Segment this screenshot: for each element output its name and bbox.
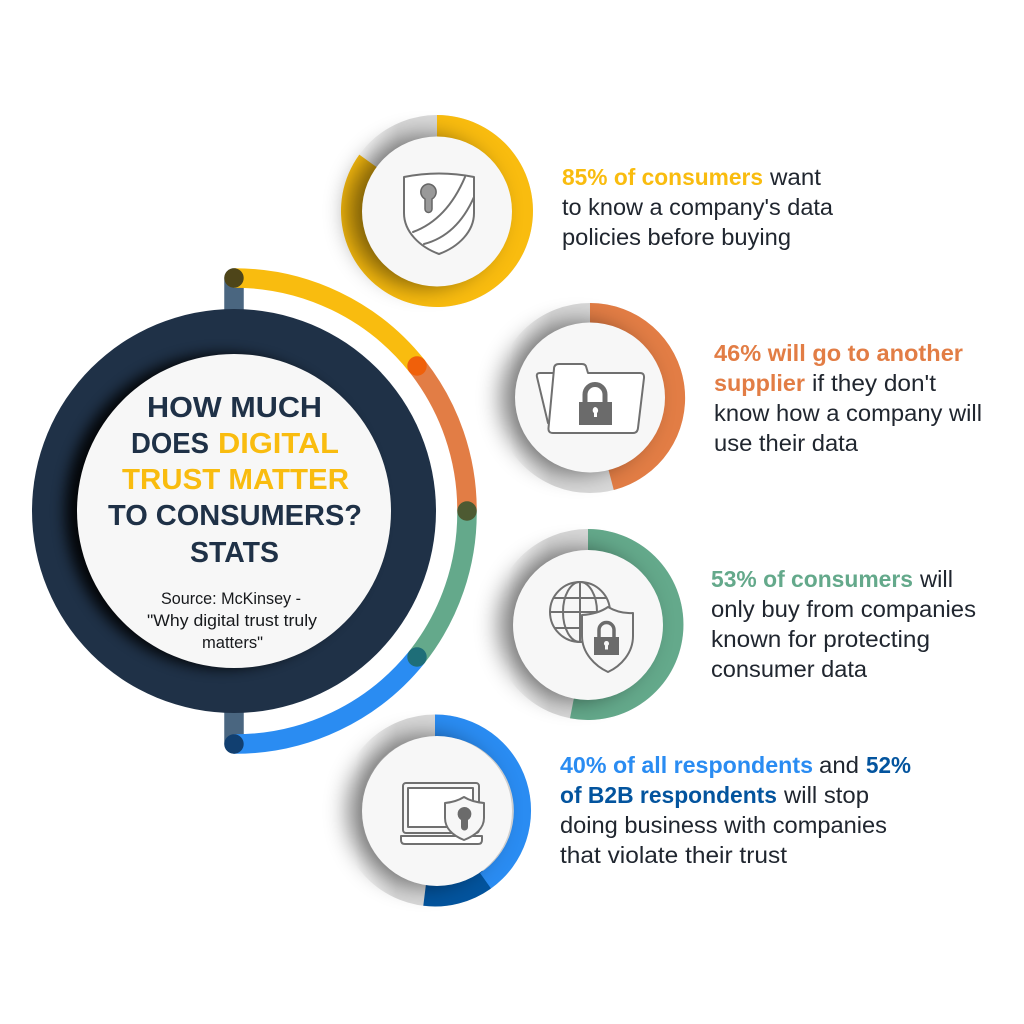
disc: [515, 322, 665, 472]
panel: 85% donut: [341, 115, 533, 307]
title line 2 dark: DOES: [131, 428, 209, 460]
shield outline: [404, 174, 474, 254]
highlighted B2B: of B2B respondents: [560, 782, 777, 808]
disc: [513, 550, 663, 700]
and: and: [819, 752, 859, 778]
shadow: [348, 736, 498, 886]
orange value arc: [590, 303, 685, 490]
highlighted line 1: 46% will go to another: [714, 340, 963, 366]
highlighted line 2: supplier: [714, 370, 805, 396]
connector stem bottom: [224, 700, 244, 744]
text: 46% stat: [714, 340, 982, 456]
connector: segmented arc around main circle: [234, 278, 467, 744]
source note: [147, 589, 318, 652]
line 4: consumer data: [711, 656, 867, 682]
joint bottom: [224, 734, 244, 754]
connector joints: [224, 268, 477, 754]
back sheet: [537, 373, 556, 423]
padlock shackle: [599, 623, 614, 638]
inner disc: [77, 354, 391, 668]
panel: 40% and 52% donut: [348, 714, 531, 907]
title line 4: TO CONSUMERS?: [108, 500, 362, 532]
shield: [445, 797, 484, 840]
arc segment: blue: [234, 657, 417, 744]
main circle: [32, 309, 436, 713]
text: 85% stat: [562, 164, 833, 250]
blue value arc: [435, 714, 531, 888]
highlighted phrase: 53% of consumers: [711, 566, 913, 592]
green value arc: [570, 529, 683, 720]
source line 2: "Why digital trust truly: [147, 611, 318, 630]
title line 1: HOW MUCH: [147, 392, 322, 424]
line 2 rest: if they don't: [812, 370, 937, 396]
padlock keyhole: [593, 407, 598, 417]
joint olive: [457, 501, 477, 521]
globe: [550, 582, 610, 642]
highlighted phrase: 85% of consumers: [562, 164, 763, 190]
highlighted 52%: 52%: [866, 752, 911, 778]
line 3: doing business with companies: [560, 812, 887, 838]
inner shadow: [58, 346, 324, 676]
title line 3: TRUST MATTER: [122, 464, 349, 496]
text: 53% stat: [711, 566, 976, 682]
yellow value arc: [341, 115, 533, 307]
navy ring: [32, 309, 436, 713]
icon: folder with padlock: [537, 364, 644, 433]
shield stripes: [413, 177, 474, 244]
keyhole: [421, 184, 436, 212]
arc segment: green: [417, 511, 467, 657]
shadow: [348, 136, 498, 286]
disc: [362, 736, 512, 886]
arc segment: yellow: [234, 278, 417, 366]
padlock keyhole: [604, 641, 609, 650]
joint orange: [407, 356, 427, 376]
line 2: to know a company's data: [562, 194, 833, 220]
title: [108, 392, 362, 569]
padlock body: [579, 402, 612, 425]
title line 2 highlight: DIGITAL: [218, 428, 339, 460]
panel: 46% donut: [501, 303, 685, 490]
disc: [362, 136, 512, 286]
phrase end: will: [919, 566, 953, 592]
line 4: use their data: [714, 430, 858, 456]
laptop base: [401, 836, 482, 844]
keyhole: [458, 807, 471, 830]
gray track: [503, 540, 673, 710]
shield: [582, 607, 633, 672]
joint teal: [407, 647, 427, 667]
shadow: [499, 550, 649, 700]
dark blue value arc: [423, 868, 491, 907]
source line 1: Source: McKinsey -: [161, 589, 301, 608]
line 3: policies before buying: [562, 224, 791, 250]
padlock shackle: [585, 384, 605, 403]
laptop screen inner: [408, 788, 473, 827]
icon: globe and shield lock: [550, 582, 633, 672]
padlock body: [594, 637, 619, 655]
shadow: [501, 323, 651, 473]
laptop screen outer: [403, 783, 479, 833]
title line 5: STATS: [190, 537, 279, 569]
line 2: only buy from companies: [711, 596, 976, 622]
gray track: [506, 314, 674, 482]
phrase end: want: [769, 164, 822, 190]
line 3: know how a company will: [714, 400, 982, 426]
infographic canvas: [32, 115, 980, 906]
highlighted 40%: 40% of all respondents: [560, 752, 813, 778]
icon: shield with keyhole: [404, 174, 474, 254]
joint top: [224, 268, 244, 288]
gray track: [352, 126, 522, 296]
arc segment: orange: [417, 366, 467, 511]
gray track: [350, 726, 520, 896]
folder front: [548, 364, 644, 433]
line 3: known for protecting: [711, 626, 930, 652]
panel: 53% donut: [499, 529, 683, 720]
source line 3: matters": [202, 633, 263, 652]
line 4: that violate their trust: [560, 842, 788, 868]
icon: laptop with shield: [401, 783, 484, 844]
text: 40% and 52% stat: [560, 752, 911, 868]
line 2 rest: will stop: [783, 782, 869, 808]
connector stem top: [224, 278, 244, 320]
